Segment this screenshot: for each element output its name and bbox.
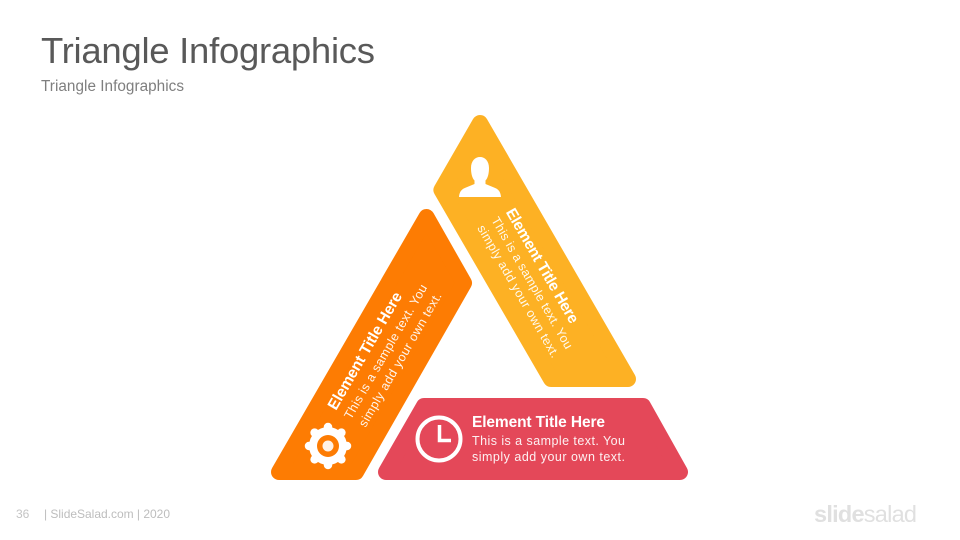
yellow panel shape — [441, 123, 628, 379]
icon: person — [459, 157, 501, 197]
icon: clock — [418, 418, 460, 460]
title: Triangle Infographics — [41, 30, 375, 71]
panel: yellow segment — [441, 123, 628, 379]
footer: page number: 36 — [16, 507, 30, 521]
red element body text: This is a sample text. You — [472, 434, 625, 448]
orange panel shape — [279, 217, 464, 472]
panel: orange segment — [279, 217, 464, 472]
yellow element body text: simply add your own text. — [474, 222, 562, 360]
logo: slidesalad: slidesalad — [814, 501, 917, 527]
yellow element body text: This is a sample text. You — [488, 214, 576, 351]
red element body text: simply add your own text. — [472, 450, 625, 464]
orange element body text: simply add your own text. — [356, 290, 445, 430]
icon: gear — [309, 427, 347, 465]
red element body text — [472, 434, 625, 464]
red panel shape — [386, 406, 680, 472]
orange element body text: This is a sample text. You — [341, 282, 430, 422]
red element title: Element Title Here — [472, 414, 605, 431]
panel: red segment — [386, 406, 680, 472]
orange element title: Element Title Here — [325, 289, 406, 413]
subtitle: Triangle Infographics — [41, 78, 184, 95]
footer: credit: | SlideSalad.com | 2020 — [44, 507, 170, 521]
yellow element title: Element Title Here — [502, 206, 582, 327]
